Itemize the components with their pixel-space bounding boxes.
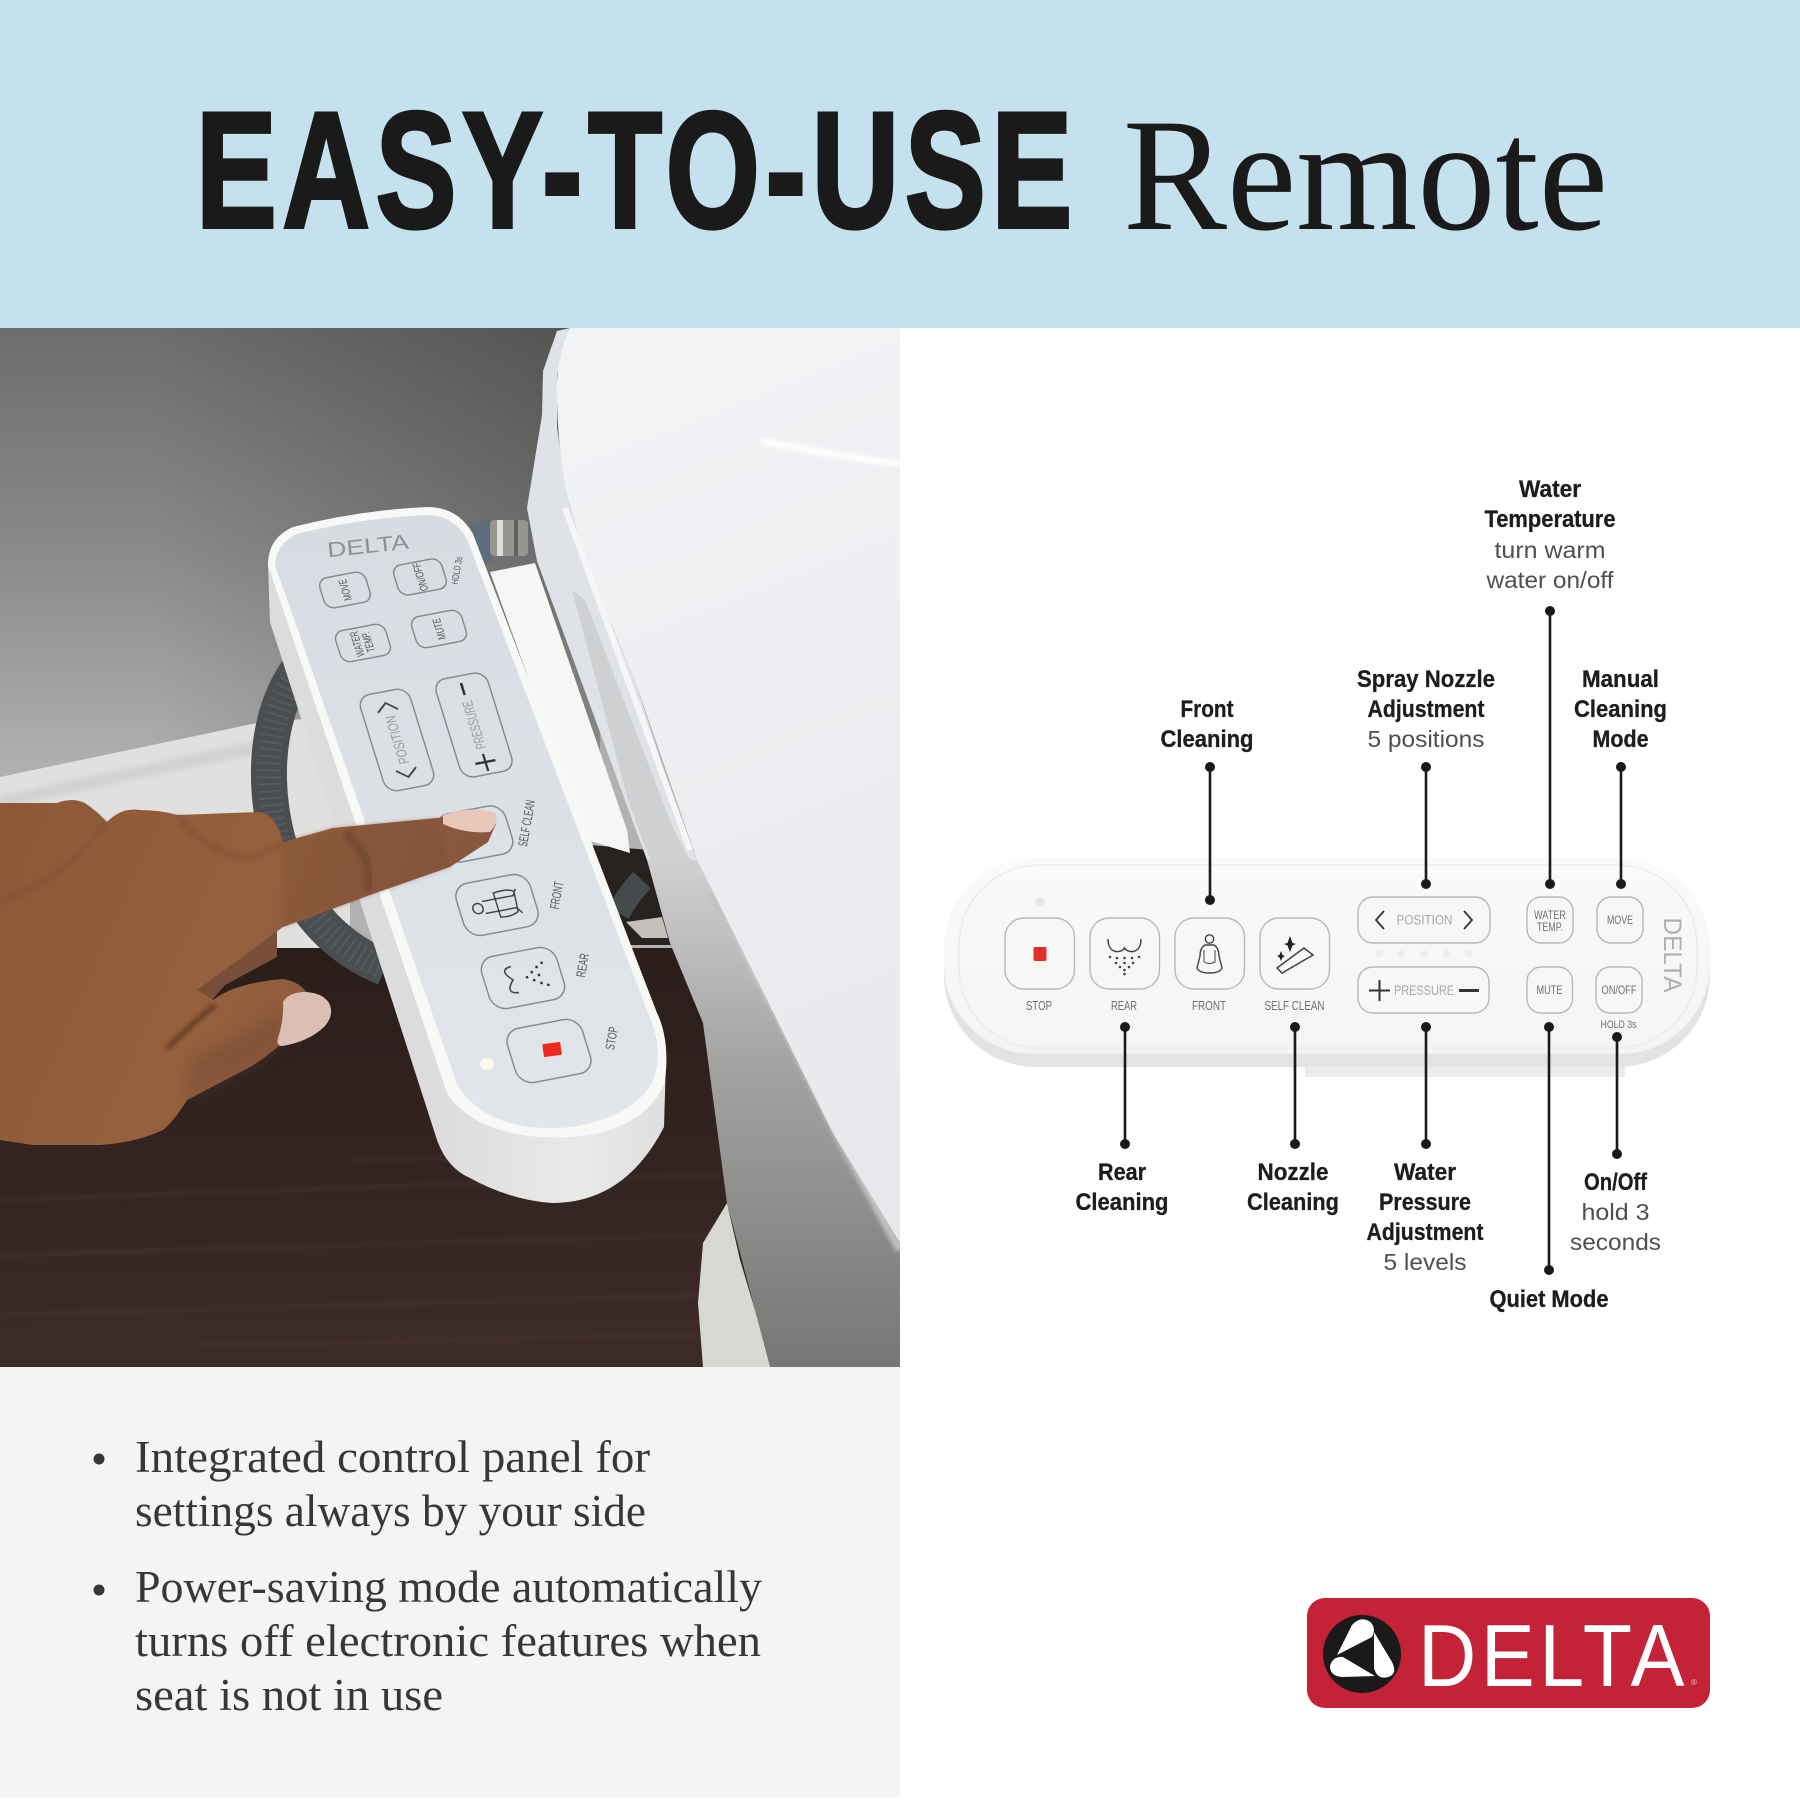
plate lip	[944, 862, 1710, 1067]
hose behind bracket	[618, 880, 642, 913]
callout: water temperature: Temperature	[1484, 506, 1616, 533]
Delta logo	[1307, 1598, 1710, 1708]
remote side labels: FRONT	[547, 880, 566, 910]
remote rim	[268, 507, 666, 1137]
button: move: MOVE	[1607, 915, 1633, 927]
callout: on/off: hold 3	[1582, 1199, 1650, 1225]
callout: water pressure adjustment: 5 levels	[1384, 1249, 1466, 1275]
button: on/off: ON/OFF	[1602, 985, 1636, 997]
remote side labels: SELF CLEAN	[515, 799, 538, 848]
button: self clean	[1260, 918, 1330, 1013]
callout: water pressure adjustment	[1366, 1022, 1484, 1275]
button: mute: MUTE	[1536, 985, 1563, 997]
callout: water pressure adjustment: Adjustment	[1366, 1219, 1484, 1246]
callout: rear cleaning	[1076, 1022, 1168, 1216]
remote brand: DELTA	[326, 531, 410, 562]
remote buttons: MUTE	[431, 617, 449, 640]
button: on/off	[1596, 967, 1642, 1031]
fingernail: thumb	[278, 992, 331, 1046]
button: move	[1597, 897, 1643, 943]
remote face	[275, 515, 658, 1128]
callout: nozzle cleaning: Cleaning	[1247, 1189, 1339, 1216]
callout: on/off: seconds	[1570, 1229, 1661, 1255]
plate face	[944, 858, 1710, 1054]
remote side labels: HOLD 3s	[450, 556, 465, 585]
callout: on/off: On/Off	[1584, 1169, 1648, 1196]
callout: manual cleaning mode: Cleaning	[1574, 696, 1667, 723]
seat upper translucent edge	[527, 328, 697, 860]
callout: spray nozzle adjustment	[1357, 666, 1495, 889]
remote buttons: MOVE	[337, 578, 355, 601]
title: EASY-TO-USE	[196, 78, 1078, 262]
callout: front cleaning	[1160, 696, 1254, 905]
button: front: FRONT	[1192, 999, 1226, 1013]
remote control diagram	[944, 858, 1710, 1077]
remote side labels: REAR	[573, 952, 592, 978]
button: position	[1358, 897, 1490, 943]
button: water temp: WATER	[1534, 910, 1566, 922]
callout: on/off	[1570, 1032, 1661, 1255]
header band	[0, 0, 1800, 328]
button: mute	[1527, 967, 1572, 1013]
button: rear: REAR	[1111, 999, 1137, 1013]
remote body	[268, 565, 666, 1203]
seat lid	[557, 328, 900, 1243]
mounting bracket	[490, 563, 630, 853]
remote buttons: WATER	[348, 630, 368, 658]
panel: feature bullets	[0, 1367, 900, 1797]
remote side labels	[450, 556, 621, 1051]
callout: manual cleaning mode: Mode	[1592, 726, 1648, 753]
remote buttons: POSITION	[383, 714, 413, 765]
callout: nozzle cleaning: Nozzle	[1258, 1159, 1328, 1186]
callout: water temperature	[1484, 476, 1616, 889]
button: pressure: PRESSURE	[1394, 983, 1454, 998]
callout: front cleaning: Front	[1180, 696, 1234, 723]
button: front	[1175, 918, 1244, 1013]
callout: quiet mode: Quiet Mode	[1490, 1286, 1608, 1313]
mounting tab	[1305, 1050, 1625, 1077]
fingernail: index	[443, 810, 497, 832]
power LED	[480, 1058, 494, 1070]
remote side labels: STOP	[602, 1026, 621, 1051]
supply hose	[269, 670, 385, 968]
remote buttons: PRESSURE	[460, 699, 490, 750]
hose connector	[470, 520, 528, 565]
bullet 2: seat is not in use	[135, 1670, 443, 1720]
callout: water temperature: water on/off	[1485, 567, 1614, 593]
button: rear	[1090, 918, 1160, 1013]
button: water temp	[1527, 897, 1573, 943]
dark gap behind bracket	[590, 845, 672, 945]
callout: rear cleaning: Cleaning	[1076, 1189, 1168, 1216]
Delta logo: DELTA	[1418, 1606, 1689, 1705]
baseboard	[0, 715, 350, 950]
LED indicator	[1035, 897, 1045, 907]
callout: spray nozzle adjustment: Adjustment	[1368, 696, 1484, 723]
bowl	[698, 1203, 772, 1367]
button: water temp: TEMP.	[1537, 922, 1563, 934]
callout: front cleaning: Cleaning	[1160, 726, 1254, 753]
button: self clean: SELF CLEAN	[1264, 999, 1324, 1013]
button: stop: STOP	[1026, 999, 1052, 1013]
bullet 1	[94, 1432, 650, 1536]
button: position: POSITION	[1396, 912, 1452, 928]
seat side band	[647, 860, 900, 1367]
plate brand: DELTA	[1658, 918, 1686, 993]
Delta logo: ®	[1691, 1678, 1697, 1687]
button: on/off: HOLD 3s	[1600, 1019, 1637, 1031]
remote buttons: TEMP.	[360, 631, 378, 653]
bullet 1: Integrated control panel for	[135, 1432, 650, 1482]
callout: water pressure adjustment: Pressure	[1379, 1189, 1471, 1216]
remote buttons	[317, 557, 595, 1085]
callout: manual cleaning mode	[1574, 666, 1667, 889]
callout: quiet mode	[1490, 1022, 1608, 1313]
callout: water pressure adjustment: Water	[1394, 1159, 1456, 1186]
wood floor	[0, 948, 900, 1368]
photo: hand pressing remote control on toilet seat	[0, 328, 900, 1368]
level dots	[1375, 950, 1473, 958]
bullet 2: Power-saving mode automatically	[135, 1562, 762, 1612]
title: Remote	[1123, 86, 1608, 264]
icon: delta triangle mark	[1323, 1615, 1401, 1693]
bullet 1: settings always by your side	[135, 1486, 646, 1536]
bullet 2	[94, 1562, 762, 1720]
button: stop	[1005, 918, 1074, 1013]
button: pressure	[1358, 967, 1489, 1013]
bullet 2: turns off electronic features when	[135, 1616, 761, 1666]
callout: water temperature: Water	[1519, 476, 1581, 503]
remote stop indicator	[542, 1042, 562, 1057]
hand	[0, 800, 497, 1145]
callout: manual cleaning mode: Manual	[1582, 666, 1659, 693]
callout: spray nozzle adjustment: 5 positions	[1368, 726, 1484, 752]
remote buttons: ON/OFF	[411, 562, 431, 592]
callout: rear cleaning: Rear	[1098, 1159, 1146, 1186]
callout: spray nozzle adjustment: Spray Nozzle	[1357, 666, 1495, 693]
callout: nozzle cleaning	[1247, 1022, 1339, 1216]
callout: water temperature: turn warm	[1494, 537, 1606, 563]
